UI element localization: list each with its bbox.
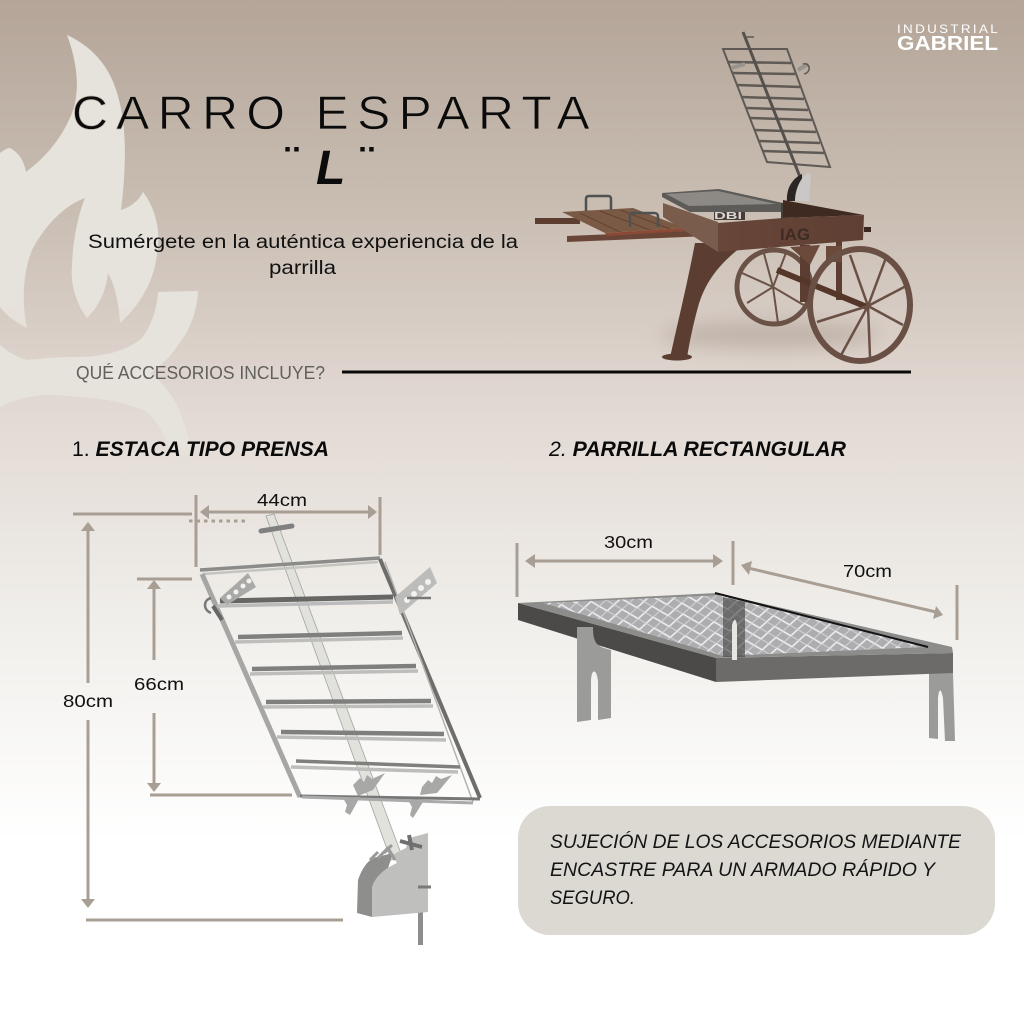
title: CARRO ESPARTA <box>72 86 598 139</box>
dimension labels: 30cm <box>604 532 653 552</box>
back wheel <box>737 250 811 324</box>
mesh <box>543 595 927 656</box>
watermark flame <box>0 35 198 458</box>
notched lower forks <box>343 773 452 818</box>
grill on cart: DBI <box>714 211 742 222</box>
dimension labels <box>63 490 307 711</box>
diagram: parrilla rectangular <box>517 532 957 741</box>
top bolt <box>261 526 292 531</box>
base plate <box>357 833 431 945</box>
dimension lines <box>517 541 957 640</box>
central pole <box>266 514 402 860</box>
callout: SEGURO. <box>550 888 635 909</box>
cart body <box>663 200 871 252</box>
photo: carro esparta <box>535 32 910 361</box>
brackets with holes <box>205 567 437 620</box>
callout: SUJECIÓN DE LOS ACCESORIOS MEDIANTE <box>550 831 961 853</box>
logo <box>897 24 1000 55</box>
subtitle: Sumérgete en la auténtica experiencia de la <box>88 232 518 253</box>
back leg <box>577 640 611 722</box>
title: L <box>316 142 345 195</box>
leg and supports <box>662 240 842 360</box>
subtitle <box>88 232 518 279</box>
title: ¨ <box>360 138 374 185</box>
heading 1: 1. ESTACA TIPO PRENSA <box>72 438 329 461</box>
subtitle: parrilla <box>269 258 336 279</box>
title <box>72 86 598 195</box>
heading 2: 2. PARRILLA RECTANGULAR <box>548 438 847 461</box>
cart body: IAG <box>780 225 810 244</box>
top rim <box>518 593 953 658</box>
diagram: estaca tipo prensa <box>63 490 480 945</box>
section rule <box>342 370 911 374</box>
tray rails and wood <box>535 196 708 242</box>
front wheel and axle <box>777 249 910 361</box>
dimension lines <box>73 495 380 920</box>
dimension arrowheads <box>525 554 943 619</box>
rack frame <box>200 558 480 803</box>
side faces <box>518 603 716 682</box>
callout: ENCASTRE PARA UN ARMADO RÁPIDO Y <box>550 860 936 881</box>
logo: GABRIEL <box>897 33 998 55</box>
front leg <box>929 673 955 741</box>
grill on cart <box>662 189 783 222</box>
dimension labels: 66cm <box>134 674 184 694</box>
folding grill <box>723 32 830 177</box>
logo: INDUSTRIAL <box>897 24 1000 36</box>
dimension labels: 80cm <box>63 691 113 711</box>
callout <box>518 806 995 935</box>
title: ¨ <box>285 138 299 185</box>
dimension labels: 44cm <box>257 490 307 510</box>
dimension labels <box>604 532 892 581</box>
dimension labels: 70cm <box>843 561 892 581</box>
dimension arrowheads <box>81 505 377 908</box>
slot <box>732 620 737 660</box>
section label: QUÉ ACCESORIOS INCLUYE? <box>76 363 325 383</box>
semicircular plate <box>787 173 811 201</box>
translucent leg <box>723 597 745 657</box>
far edge <box>715 593 928 647</box>
